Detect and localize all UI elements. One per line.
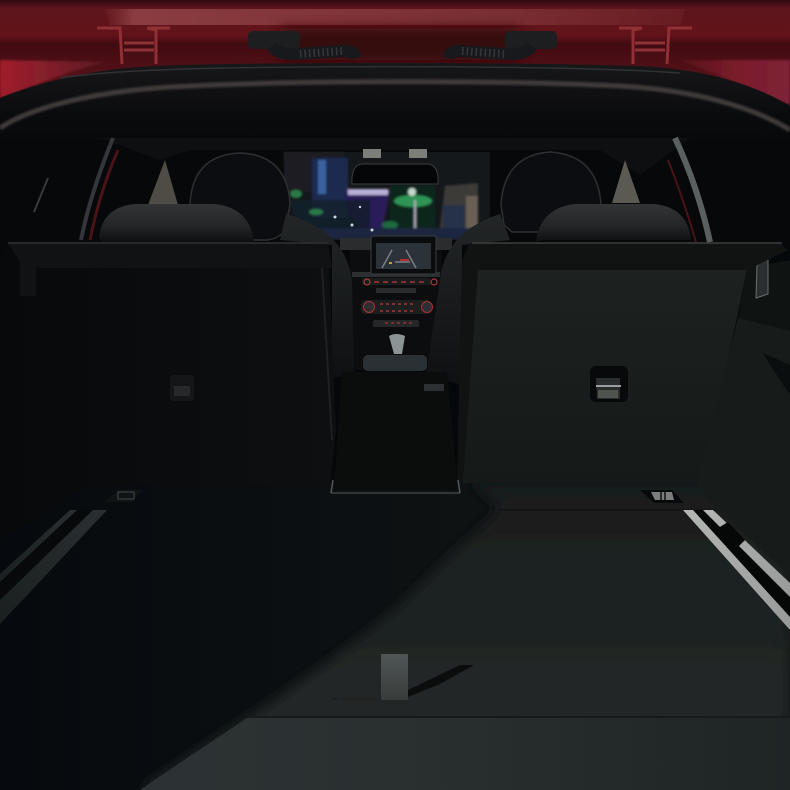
front seat bolsters xyxy=(280,214,510,385)
left headrest cushion xyxy=(99,204,254,242)
centre stack controls xyxy=(350,250,442,371)
dark floor xyxy=(0,482,790,790)
left headrest xyxy=(190,153,290,240)
pass-through hatch xyxy=(331,372,460,493)
right side trim xyxy=(697,258,790,576)
folded left seatback xyxy=(0,243,336,540)
cabin interior xyxy=(0,140,790,250)
right floor rails xyxy=(683,510,790,630)
side windows and pillars xyxy=(34,138,710,242)
floor lit region xyxy=(140,484,790,790)
right headrest xyxy=(501,152,601,232)
right headrest cushion xyxy=(536,204,691,242)
floor tab and its shadow xyxy=(330,654,474,700)
windscreen with night city xyxy=(284,149,490,240)
right latch xyxy=(640,490,684,503)
rear-view mirror xyxy=(352,164,438,184)
red tailgate xyxy=(0,0,790,110)
folded right seatback xyxy=(457,243,788,483)
gas strut left xyxy=(248,31,356,58)
infotainment screen xyxy=(371,236,436,274)
roof lining arc xyxy=(0,63,790,150)
left floor rails xyxy=(0,510,107,624)
left latch xyxy=(104,490,142,502)
headliner centre xyxy=(100,138,690,175)
dashboard strip xyxy=(340,238,452,250)
hinges xyxy=(97,28,692,64)
gas strut right xyxy=(448,31,557,58)
